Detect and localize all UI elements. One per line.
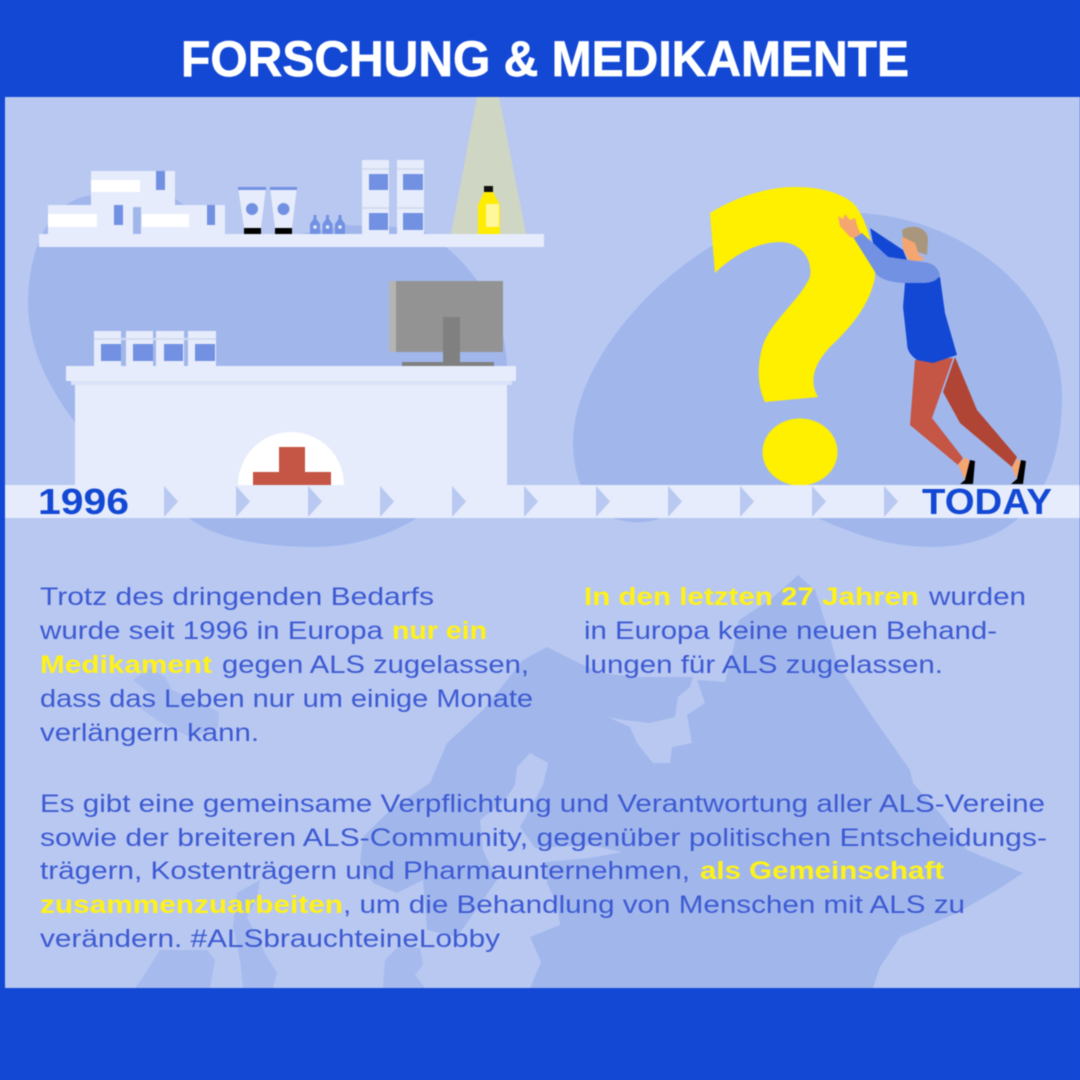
- text block: right column: in Europa keine neuen Behand-: [584, 617, 997, 645]
- cream tubes: [238, 187, 297, 234]
- text block: right column: [584, 583, 1026, 679]
- text block: bottom paragraph: als Gemeinschaft: [700, 857, 945, 885]
- text block: left column: wurde seit 1996 in Europa: [39, 617, 383, 645]
- icon: red cross emblem: [238, 432, 344, 485]
- text block: bottom paragraph: Es gibt eine gemeinsame Verpflichtung und Verantwortung aller ALS-Vereine: [40, 790, 1045, 818]
- small bottles: [310, 215, 345, 234]
- timeline strip: [5, 481, 1080, 522]
- monitor: [389, 281, 503, 366]
- text block: left column: [39, 583, 533, 747]
- text block: bottom paragraph: verändern. #ALSbrauchteineLobby: [40, 925, 501, 953]
- timeline label today: TODAY: [922, 481, 1052, 522]
- stacked jars: [362, 160, 424, 234]
- background map of Europe: [133, 575, 1023, 988]
- counter: [66, 366, 516, 485]
- text block: bottom paragraph: zusammenzuarbeiten: [40, 891, 343, 919]
- text block: right column: wurden: [928, 583, 1026, 611]
- text block: left column: verlängern kann.: [40, 719, 259, 747]
- text block: left column: Trotz des dringenden Bedarfs: [40, 583, 434, 611]
- text block: bottom paragraph: trägern, Kostenträgern und Pharmaunternehmen,: [40, 857, 690, 885]
- shelf with medicine products: [39, 160, 544, 247]
- jars on counter: [94, 331, 216, 366]
- spotlight: [451, 97, 526, 234]
- title: FORSCHUNG & MEDIKAMENTE: [181, 31, 909, 87]
- background blob left: [28, 195, 507, 547]
- text block: left column: nur ein: [392, 617, 487, 645]
- medicine boxes: [48, 171, 225, 234]
- text block: right column: lungen für ALS zugelassen.: [584, 651, 943, 679]
- text block: bottom paragraph: , um die Behandlung von Menschen mit ALS zu: [343, 891, 965, 919]
- text block: bottom paragraph: [40, 790, 1047, 953]
- icon: yellow question mark: [710, 187, 875, 486]
- text block: left column: dass das Leben nur um einige Monate: [40, 685, 533, 713]
- text block: left column: Medikament: [40, 651, 213, 679]
- text block: left column: gegen ALS zugelassen,: [222, 651, 529, 679]
- text block: right column: In den letzten 27 Jahren: [584, 583, 919, 611]
- yellow bottle: [478, 186, 500, 234]
- timeline arrows: [164, 486, 898, 517]
- text block: bottom paragraph: sowie der breiteren ALS-Community, gegenüber politischen Entscheidungs-: [40, 824, 1047, 852]
- timeline label 1996: 1996: [38, 481, 129, 522]
- person pushing the question mark: [838, 214, 1026, 484]
- background blob right: [573, 213, 1062, 547]
